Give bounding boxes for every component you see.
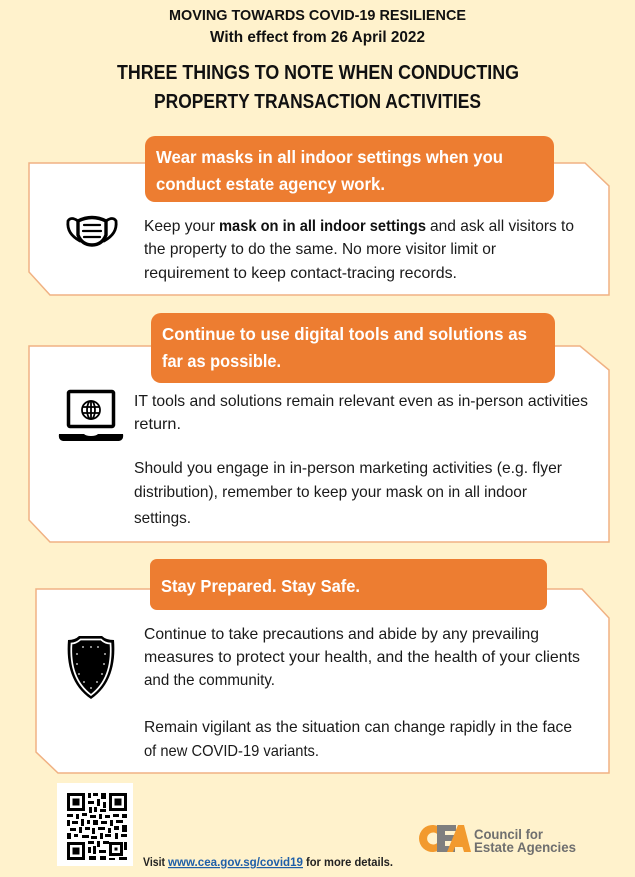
heading banner: wear masks: conduct estate agency work. <box>156 174 385 194</box>
heading banner: digital tools: far as possible. <box>162 351 281 371</box>
text block: stay prepared: measures to protect your health, and the health of your clients <box>144 649 580 666</box>
text block: stay prepared: Continue to take precautions and abide by any prevailing <box>144 626 539 643</box>
text block: wear masks: mask on in all indoor settings <box>219 218 426 235</box>
header: resilience notice: MOVING TOWARDS COVID-19 RESILIENCE <box>169 7 466 24</box>
text block: digital tools <box>134 393 588 527</box>
heading banner: stay prepared <box>150 559 547 610</box>
text block: digital tools: settings. <box>134 510 191 527</box>
heading banner: wear masks: Wear masks in all indoor settings when you <box>156 147 503 167</box>
text block: wear masks: and ask all visitors to <box>430 218 574 235</box>
panel: wear masks <box>29 136 609 295</box>
logo: Council for Estate Agencies <box>419 825 576 855</box>
text block: digital tools: Should you engage in in-person marketing activities (e.g. flyer <box>134 460 563 477</box>
title: THREE THINGS TO NOTE WHEN CONDUCTING <box>117 62 519 84</box>
QR code <box>57 783 133 866</box>
footer: link to more details <box>143 855 393 869</box>
text block: digital tools: IT tools and solutions remain relevant even as in-person activities <box>134 393 588 410</box>
footer: link to more details: for more details. <box>306 855 393 869</box>
text block: stay prepared <box>144 626 580 760</box>
text block: stay prepared: and the community. <box>144 672 275 689</box>
text block: stay prepared: Remain vigilant as the situation can change rapidly in the face <box>144 719 572 736</box>
heading banner: stay prepared: Stay Prepared. Stay Safe. <box>161 576 360 596</box>
icon: laptop with globe <box>59 392 123 441</box>
title: PROPERTY TRANSACTION ACTIVITIES <box>154 91 481 113</box>
footer: link to more details: www.cea.gov.sg/covid19 <box>167 855 303 869</box>
text block: wear masks <box>144 218 574 282</box>
text block: wear masks: the property to do the same. No more visitor limit or <box>144 241 497 258</box>
header: resilience notice: With effect from 26 April 2022 <box>210 29 425 46</box>
heading banner: wear masks <box>145 136 554 202</box>
panel: stay prepared <box>36 559 609 773</box>
footer: link to more details: Visit <box>143 855 165 869</box>
text block: stay prepared: of new COVID-19 variants. <box>144 743 319 760</box>
title <box>117 62 519 113</box>
header: resilience notice <box>169 7 466 46</box>
text block: digital tools: distribution), remember to keep your mask on in all indoor <box>134 484 528 501</box>
icon: face mask <box>68 218 116 245</box>
text block: digital tools: return. <box>134 416 181 433</box>
logo: Council for Estate Agencies: Estate Agencies <box>474 839 576 855</box>
logo: Council for Estate Agencies: Council for <box>474 826 544 842</box>
panel: digital tools <box>29 313 609 542</box>
icon: shield <box>68 636 114 699</box>
heading banner: digital tools <box>151 313 555 383</box>
text block: wear masks: Keep your <box>144 218 216 235</box>
heading banner: digital tools: Continue to use digital tools and solutions as <box>162 324 527 344</box>
text block: wear masks: requirement to keep contact-tracing records. <box>144 265 457 282</box>
